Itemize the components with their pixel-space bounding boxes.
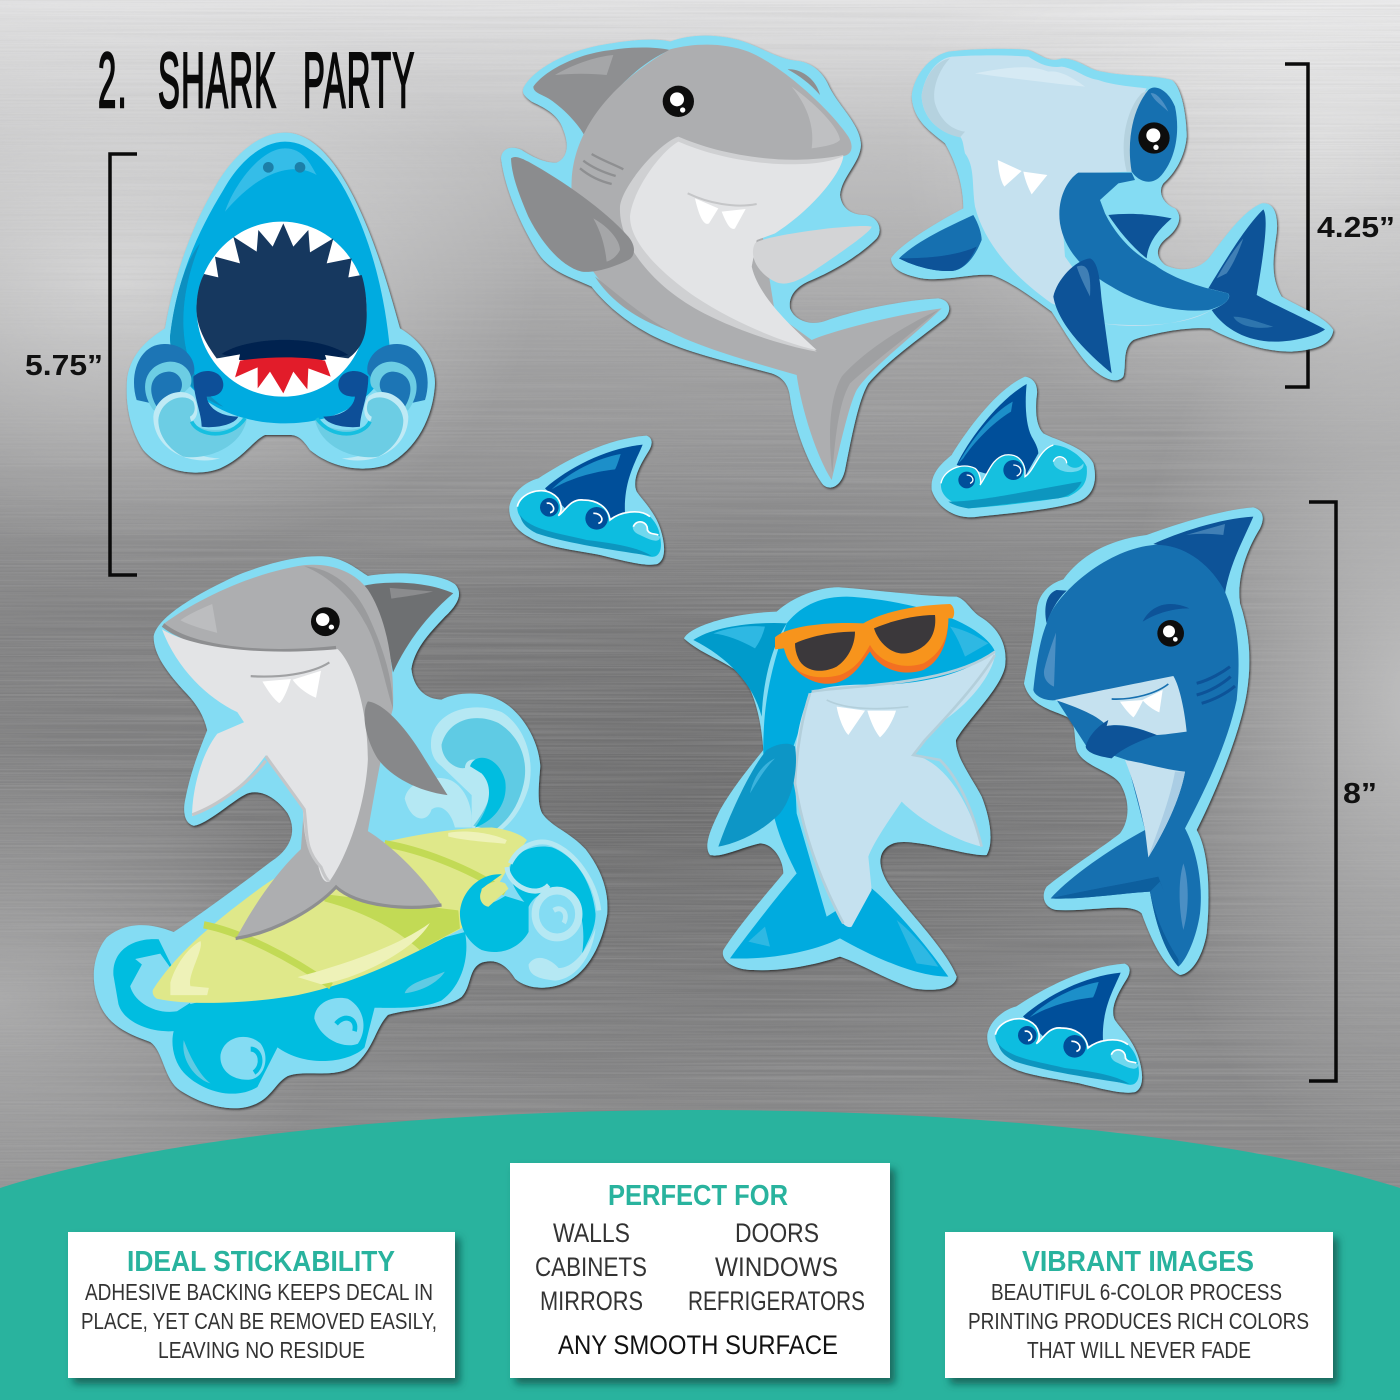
card: perfect for: REFRIGERATORS bbox=[688, 1286, 865, 1316]
eye bbox=[663, 86, 694, 117]
title: SHARK bbox=[158, 37, 277, 124]
card: vibrant images: VIBRANT IMAGES bbox=[1022, 1246, 1254, 1278]
sticker: grey shark bbox=[501, 36, 949, 488]
sticker: small fin left bbox=[509, 436, 664, 565]
card: perfect for: DOORS bbox=[735, 1218, 819, 1248]
measurement: 5.75 inch: 5.75” bbox=[25, 350, 103, 382]
card: perfect for: WINDOWS bbox=[715, 1252, 838, 1282]
card: ideal stickability: LEAVING NO RESIDUE bbox=[158, 1337, 365, 1363]
card: vibrant images: PRINTING PRODUCES RICH COLORS bbox=[968, 1308, 1309, 1334]
eye bbox=[1157, 620, 1184, 647]
eye bbox=[311, 607, 340, 636]
sunglasses bbox=[775, 604, 954, 684]
card: ideal stickability bbox=[68, 1232, 455, 1378]
card: perfect for: MIRRORS bbox=[540, 1286, 643, 1316]
card: ideal stickability: ADHESIVE BACKING KEEPS DECAL IN bbox=[85, 1279, 433, 1305]
measurement: 4.25 inch: 4.25” bbox=[1317, 212, 1395, 244]
water bbox=[113, 707, 531, 1094]
title: 2. bbox=[98, 37, 128, 124]
right wave bbox=[315, 344, 428, 460]
card: perfect for bbox=[510, 1163, 890, 1378]
card: vibrant images bbox=[945, 1232, 1333, 1378]
card: perfect for: ANY SMOOTH SURFACE bbox=[558, 1330, 838, 1360]
lower teeth bbox=[216, 354, 349, 377]
sticker: surfing shark bbox=[94, 556, 608, 1108]
card: ideal stickability: IDEAL STICKABILITY bbox=[127, 1246, 395, 1278]
teal banner bbox=[0, 1110, 1400, 1400]
card: vibrant images: THAT WILL NEVER FADE bbox=[1027, 1337, 1251, 1363]
card: perfect for: CABINETS bbox=[535, 1252, 647, 1282]
sticker: small fin top right bbox=[932, 377, 1095, 517]
sticker: small fin bottom right bbox=[987, 964, 1142, 1093]
bracket: 8 inch bbox=[1309, 502, 1336, 1081]
sticker: dark blue shark bbox=[1024, 507, 1263, 975]
surfboard bbox=[153, 828, 527, 1003]
bracket: 4.25 inch bbox=[1285, 64, 1308, 387]
bracket: 5.75 inch bbox=[110, 154, 137, 575]
measurement: 8 inch: 8” bbox=[1343, 778, 1377, 810]
sticker: open mouth shark bbox=[127, 133, 435, 473]
card: perfect for: WALLS bbox=[553, 1218, 630, 1248]
card: vibrant images: BEAUTIFUL 6-COLOR PROCESS bbox=[991, 1279, 1282, 1305]
grey surfing shark bbox=[162, 565, 453, 939]
front wave bbox=[460, 842, 599, 981]
card: ideal stickability: PLACE, YET CAN BE REMOVED EASILY, bbox=[81, 1308, 437, 1334]
card: perfect for: PERFECT FOR bbox=[608, 1180, 788, 1212]
sticker: shark with sunglasses bbox=[684, 587, 1006, 990]
left wave bbox=[134, 344, 247, 460]
title: PARTY bbox=[303, 37, 415, 124]
sticker: hammerhead shark bbox=[891, 49, 1333, 380]
eye bbox=[1138, 122, 1170, 154]
